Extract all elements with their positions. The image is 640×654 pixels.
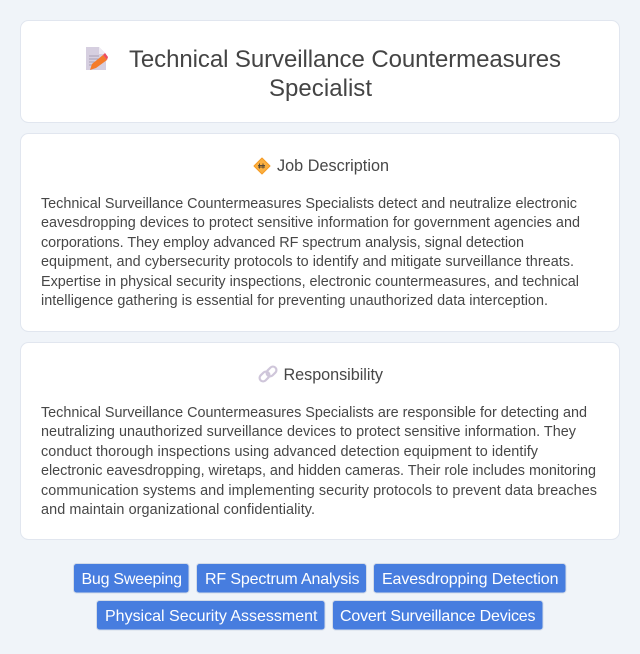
responsibility text: communication systems and implementing security protocols to prevent data breaches [41,483,597,499]
responsibility text [41,405,597,518]
tag: rf spectrum analysis: RF Spectrum Analysis [205,571,360,588]
job description text: Expertise in physical security inspections, electronic countermeasures, and technical [41,274,579,290]
tag: bug sweeping: Bug Sweeping [82,571,182,588]
tags [74,564,566,630]
title text [129,46,561,102]
tag: covert surveillance devices: Covert Surveillance Devices [340,608,536,625]
job description text: equipment, and cybersecurity protocols to identify and mitigate surveillance threats. [41,254,574,270]
panel: title [20,20,620,122]
job description text: intelligence gathering is essential for preventing unauthorized data interception. [41,293,548,309]
tag: covert surveillance devices [332,600,543,630]
panel: responsibility [20,342,620,540]
tag: physical security assessment [96,600,325,630]
responsibility text: and maintain organizational confidentiality. [41,502,315,518]
responsibility text: neutralizing unauthorized surveillance devices to protect sensitive information. They [41,424,577,440]
tag: rf spectrum analysis [196,564,366,593]
title text: Specialist [269,75,372,102]
job description text: corporations. They employ advanced RF spectrum analysis, signal detection [41,235,524,251]
job description text [41,196,580,309]
job description text: Technical Surveillance Countermeasures Specialists detect and neutralize electronic [41,196,577,212]
job description text: eavesdropping devices to protect sensitive information for government agencies and [41,215,580,231]
responsibility text: electronic eavesdropping, wiretaps, and hidden cameras. Their role includes monitoring [41,463,596,479]
icon: construction diamond [254,158,270,174]
responsibility text: conduct thorough inspections using advanced detection equipment to identify [41,444,539,460]
heading: job description: Job Description [277,157,389,175]
panel: job description [20,134,620,332]
tag: bug sweeping [74,564,189,593]
tag: eavesdropping detection: Eavesdropping Detection [382,571,558,588]
icon: chain link [258,365,278,383]
tag: eavesdropping detection [374,564,566,593]
icon: document with pencil [86,47,108,70]
title text: Technical Surveillance Countermeasures [129,46,561,73]
heading: responsibility: Responsibility [284,366,384,384]
tag: physical security assessment: Physical Security Assessment [105,608,318,625]
responsibility text: Technical Surveillance Countermeasures Specialists are responsible for detecting and [41,405,587,421]
